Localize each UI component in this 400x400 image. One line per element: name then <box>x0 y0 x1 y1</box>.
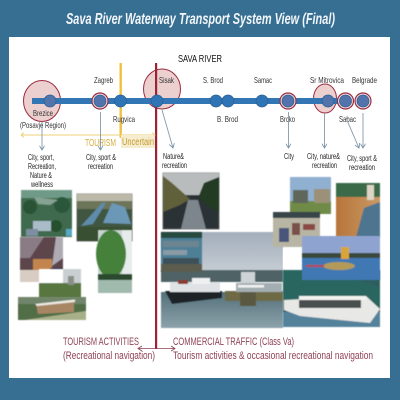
photo: castle <box>39 269 81 298</box>
bottom left heading <box>63 336 155 362</box>
city names: Belgrade <box>352 75 377 85</box>
activity labels: City, sport & <box>347 154 378 163</box>
city nodes with rings <box>92 93 371 109</box>
activity labels: City, nature& <box>307 152 341 161</box>
photo: rowing boats <box>302 236 380 280</box>
text: commercial traffic: COMMERCIAL TRAFFIC (Class Va) <box>173 336 294 348</box>
tourism limit line <box>120 63 122 138</box>
activity labels: City <box>284 152 294 161</box>
activity labels: recreation <box>312 161 337 170</box>
activity labels: wellness <box>30 180 53 189</box>
bottom right heading <box>173 336 373 362</box>
activity labels: Nature& <box>163 152 185 161</box>
activity labels <box>28 152 378 189</box>
city names: B. Brod <box>217 114 238 124</box>
commercial limit line <box>155 63 157 349</box>
city names: S. Brod <box>203 75 223 85</box>
photo: old town <box>20 237 63 282</box>
chart: river schematic <box>20 63 377 349</box>
photo: beach crowd <box>336 183 380 237</box>
activity labels: recreation <box>88 162 113 171</box>
city names: Brcko <box>280 114 295 124</box>
city names: Brezice <box>33 108 53 118</box>
city names: Samac <box>254 75 273 85</box>
city nodes <box>44 95 369 107</box>
activity labels: Recreation, <box>28 162 56 171</box>
photo: river ship <box>161 232 283 328</box>
photo: riverside building <box>18 297 86 320</box>
city names: Sr Mitrovica <box>310 75 344 85</box>
photo: old fort <box>290 177 331 214</box>
photo: white gap <box>283 248 302 269</box>
photo: river aerial <box>77 194 132 241</box>
arrow: split <box>138 346 175 351</box>
city names: (Posavje Region) <box>20 120 66 130</box>
text: tourism activities: TOURISM ACTIVITIES <box>63 336 139 348</box>
label: tourism: TOURISM <box>85 138 116 149</box>
photo: marina <box>161 232 202 272</box>
river line <box>32 98 340 104</box>
photo: tree <box>96 230 132 293</box>
heading: Sava River: SAVA RIVER <box>178 53 222 65</box>
text: recreational navigation: (Recreational navigation) <box>63 350 155 362</box>
city names <box>20 75 377 130</box>
photo: cruise ship <box>283 270 380 327</box>
label: uncertain: Uncertain <box>122 137 154 148</box>
activity labels: City, sport & <box>86 153 117 162</box>
activity labels: recreation <box>162 161 187 170</box>
activity labels: City, sport, <box>28 153 54 162</box>
photo: aerial spa <box>21 190 72 237</box>
activity labels: Nature & <box>30 171 53 180</box>
photo: nature river <box>163 173 219 229</box>
city names: Rugvica <box>113 114 135 124</box>
zone circles <box>24 69 336 122</box>
label: uncertain background <box>121 135 155 148</box>
photo: people on rocks <box>273 212 320 247</box>
city names: Sabac <box>339 114 357 124</box>
city names: Zagreb <box>94 75 113 85</box>
city names: Sisak <box>159 75 175 85</box>
arrow: tourism extent <box>21 132 155 138</box>
activity labels: recreation <box>349 163 375 172</box>
leader arrows <box>42 110 363 150</box>
